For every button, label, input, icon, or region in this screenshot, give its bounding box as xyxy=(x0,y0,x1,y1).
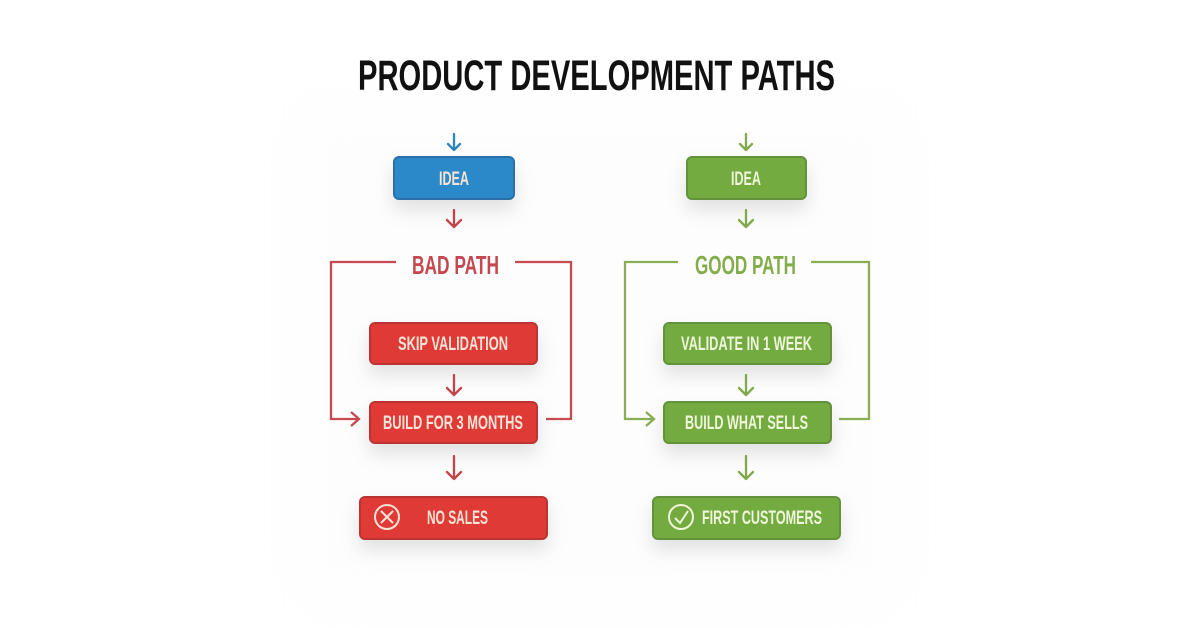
box: first customers xyxy=(653,497,840,539)
heading: good path: GOOD PATH xyxy=(695,250,796,280)
box: skip validation xyxy=(370,323,537,364)
box: validate in 1 week xyxy=(664,323,831,364)
title: PRODUCT DEVELOPMENT PATHS xyxy=(358,52,835,100)
panel: bad path column xyxy=(331,134,571,539)
bracket: left feedback line with arrow xyxy=(625,262,678,426)
box: build for 3 months: BUILD FOR 3 MONTHS xyxy=(383,412,523,434)
bracket: right feedback line xyxy=(515,262,571,419)
box: idea (green) xyxy=(687,157,806,199)
panel: good path column xyxy=(625,134,869,539)
arrow: into green idea xyxy=(740,134,752,150)
heading: bad path: BAD PATH xyxy=(412,250,499,280)
arrow: build to first customers xyxy=(739,456,753,479)
icon: check in circle xyxy=(669,505,693,529)
box: idea (blue) xyxy=(394,157,514,199)
icon: x in circle xyxy=(375,505,399,529)
box: idea (blue): IDEA xyxy=(439,168,469,190)
box: build what sells xyxy=(664,402,831,443)
box: skip validation: SKIP VALIDATION xyxy=(398,333,508,355)
box: validate in 1 week: VALIDATE IN 1 WEEK xyxy=(681,333,812,355)
bracket: right feedback line xyxy=(811,262,869,419)
box: first customers: FIRST CUSTOMERS xyxy=(702,507,822,529)
box: build for 3 months xyxy=(370,402,537,443)
arrow: into blue idea xyxy=(448,134,460,150)
box: build what sells: BUILD WHAT SELLS xyxy=(685,412,808,434)
arrow: build to no sales xyxy=(447,456,461,479)
arrow: idea to good path xyxy=(739,210,753,227)
box: no sales: NO SALES xyxy=(427,507,488,529)
arrow: skip to build xyxy=(447,375,461,395)
box: idea (green): IDEA xyxy=(731,168,761,190)
arrow: idea to bad path xyxy=(447,210,461,227)
bracket: left feedback line with arrow xyxy=(331,262,396,426)
box: no sales xyxy=(360,497,547,539)
arrow: validate to build xyxy=(739,375,753,395)
